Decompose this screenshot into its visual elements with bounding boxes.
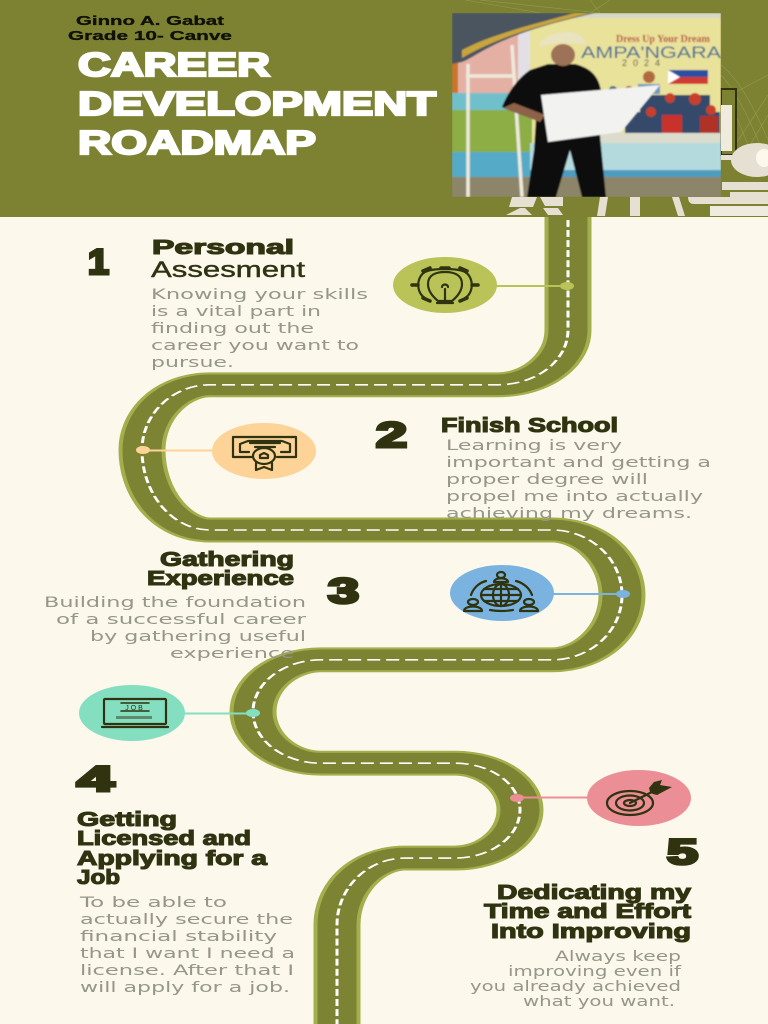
text 5: Always keep: [555, 949, 681, 965]
number 3: 3: [328, 572, 359, 611]
text 2: Learning is very: [446, 438, 623, 454]
text 1: [151, 287, 368, 371]
photo: [452, 13, 722, 197]
text 1: is a vital part in: [151, 304, 321, 320]
winding road: [142, 200, 622, 1024]
text 4: [78, 895, 295, 996]
header decoration: desk illustration: [465, 0, 768, 216]
photo: 2024: [622, 58, 666, 68]
heading 4: Applying for a: [77, 848, 268, 870]
icon: gear lightbulb: [393, 257, 574, 313]
author: Grade 10- Canve: [68, 28, 232, 43]
text 1: finding out the: [151, 321, 314, 337]
text 4: To be able to: [78, 895, 227, 911]
heading 4: Licensed and: [77, 828, 251, 850]
author: Ginno A. Gabat: [76, 13, 225, 28]
icon: certificate: [136, 423, 316, 479]
step 1: [88, 237, 574, 371]
text 3: [44, 595, 306, 662]
step 5: [470, 770, 698, 1010]
step 3: [44, 549, 630, 662]
step 4: [77, 685, 295, 996]
heading 5: [484, 882, 692, 943]
number 4: 4: [77, 760, 115, 799]
number 5: 5: [667, 833, 698, 872]
title: CAREER: [78, 46, 270, 83]
text 4: will apply for a job.: [80, 980, 290, 996]
number 1: 1: [88, 243, 109, 282]
heading 1: Personal: [152, 237, 294, 259]
text 3: by gathering useful: [90, 629, 306, 645]
text 2: [446, 438, 711, 522]
heading 4: Job: [77, 867, 120, 889]
icon: laptop with job listing: JOB: [125, 705, 145, 712]
heading 2: Finish School: [441, 415, 618, 437]
title: ROADMAP: [78, 124, 316, 161]
header band: [0, 0, 768, 217]
text 3: experience: [170, 646, 294, 662]
photo: AMPA'NGARA: [581, 43, 722, 62]
text 4: actually secure the: [80, 912, 293, 928]
text 4: that I want I need a: [80, 946, 295, 962]
text 3: Building the foundation: [44, 595, 306, 611]
text 2: achieving my dreams.: [446, 506, 692, 522]
person: [502, 64, 606, 197]
text 1: Knowing your skills: [151, 287, 368, 303]
text 5: what you want.: [523, 994, 675, 1010]
heading 5: Dedicating my: [497, 882, 692, 904]
text 2: important and getting a: [446, 455, 711, 471]
text 1: career you want to: [151, 338, 359, 354]
text 5: [470, 949, 682, 1010]
photo: Dress Up Your Dream: [616, 34, 710, 45]
step 2: [136, 415, 711, 522]
text 2: propel me into actually: [446, 489, 704, 505]
text 4: financial stability: [80, 929, 278, 945]
text 5: you already achieved: [470, 979, 681, 995]
author: [68, 13, 232, 43]
text 1: pursue.: [151, 355, 234, 371]
heading 1: Assesment: [151, 257, 305, 282]
text 2: proper degree will: [446, 472, 648, 488]
heading 3: Experience: [147, 568, 294, 590]
icon: globe and people: [450, 565, 630, 621]
icon: laptop with job listing: [79, 685, 260, 741]
text 5: improving even if: [508, 964, 682, 980]
heading 3: Gathering: [160, 549, 294, 571]
heading 4: [77, 809, 268, 889]
title: [78, 46, 436, 161]
heading 3: [147, 549, 294, 590]
text 4: license. After that I: [80, 963, 294, 979]
heading 4: Getting: [77, 809, 177, 831]
number 2: 2: [376, 416, 407, 455]
title: DEVELOPMENT: [78, 85, 436, 122]
heading 5: Into Improving: [491, 921, 691, 943]
text 3: of a successful career: [56, 612, 306, 628]
heading 5: Time and Effort: [484, 901, 691, 923]
icon: target with arrow: [510, 770, 691, 826]
heading 1: [151, 237, 305, 282]
